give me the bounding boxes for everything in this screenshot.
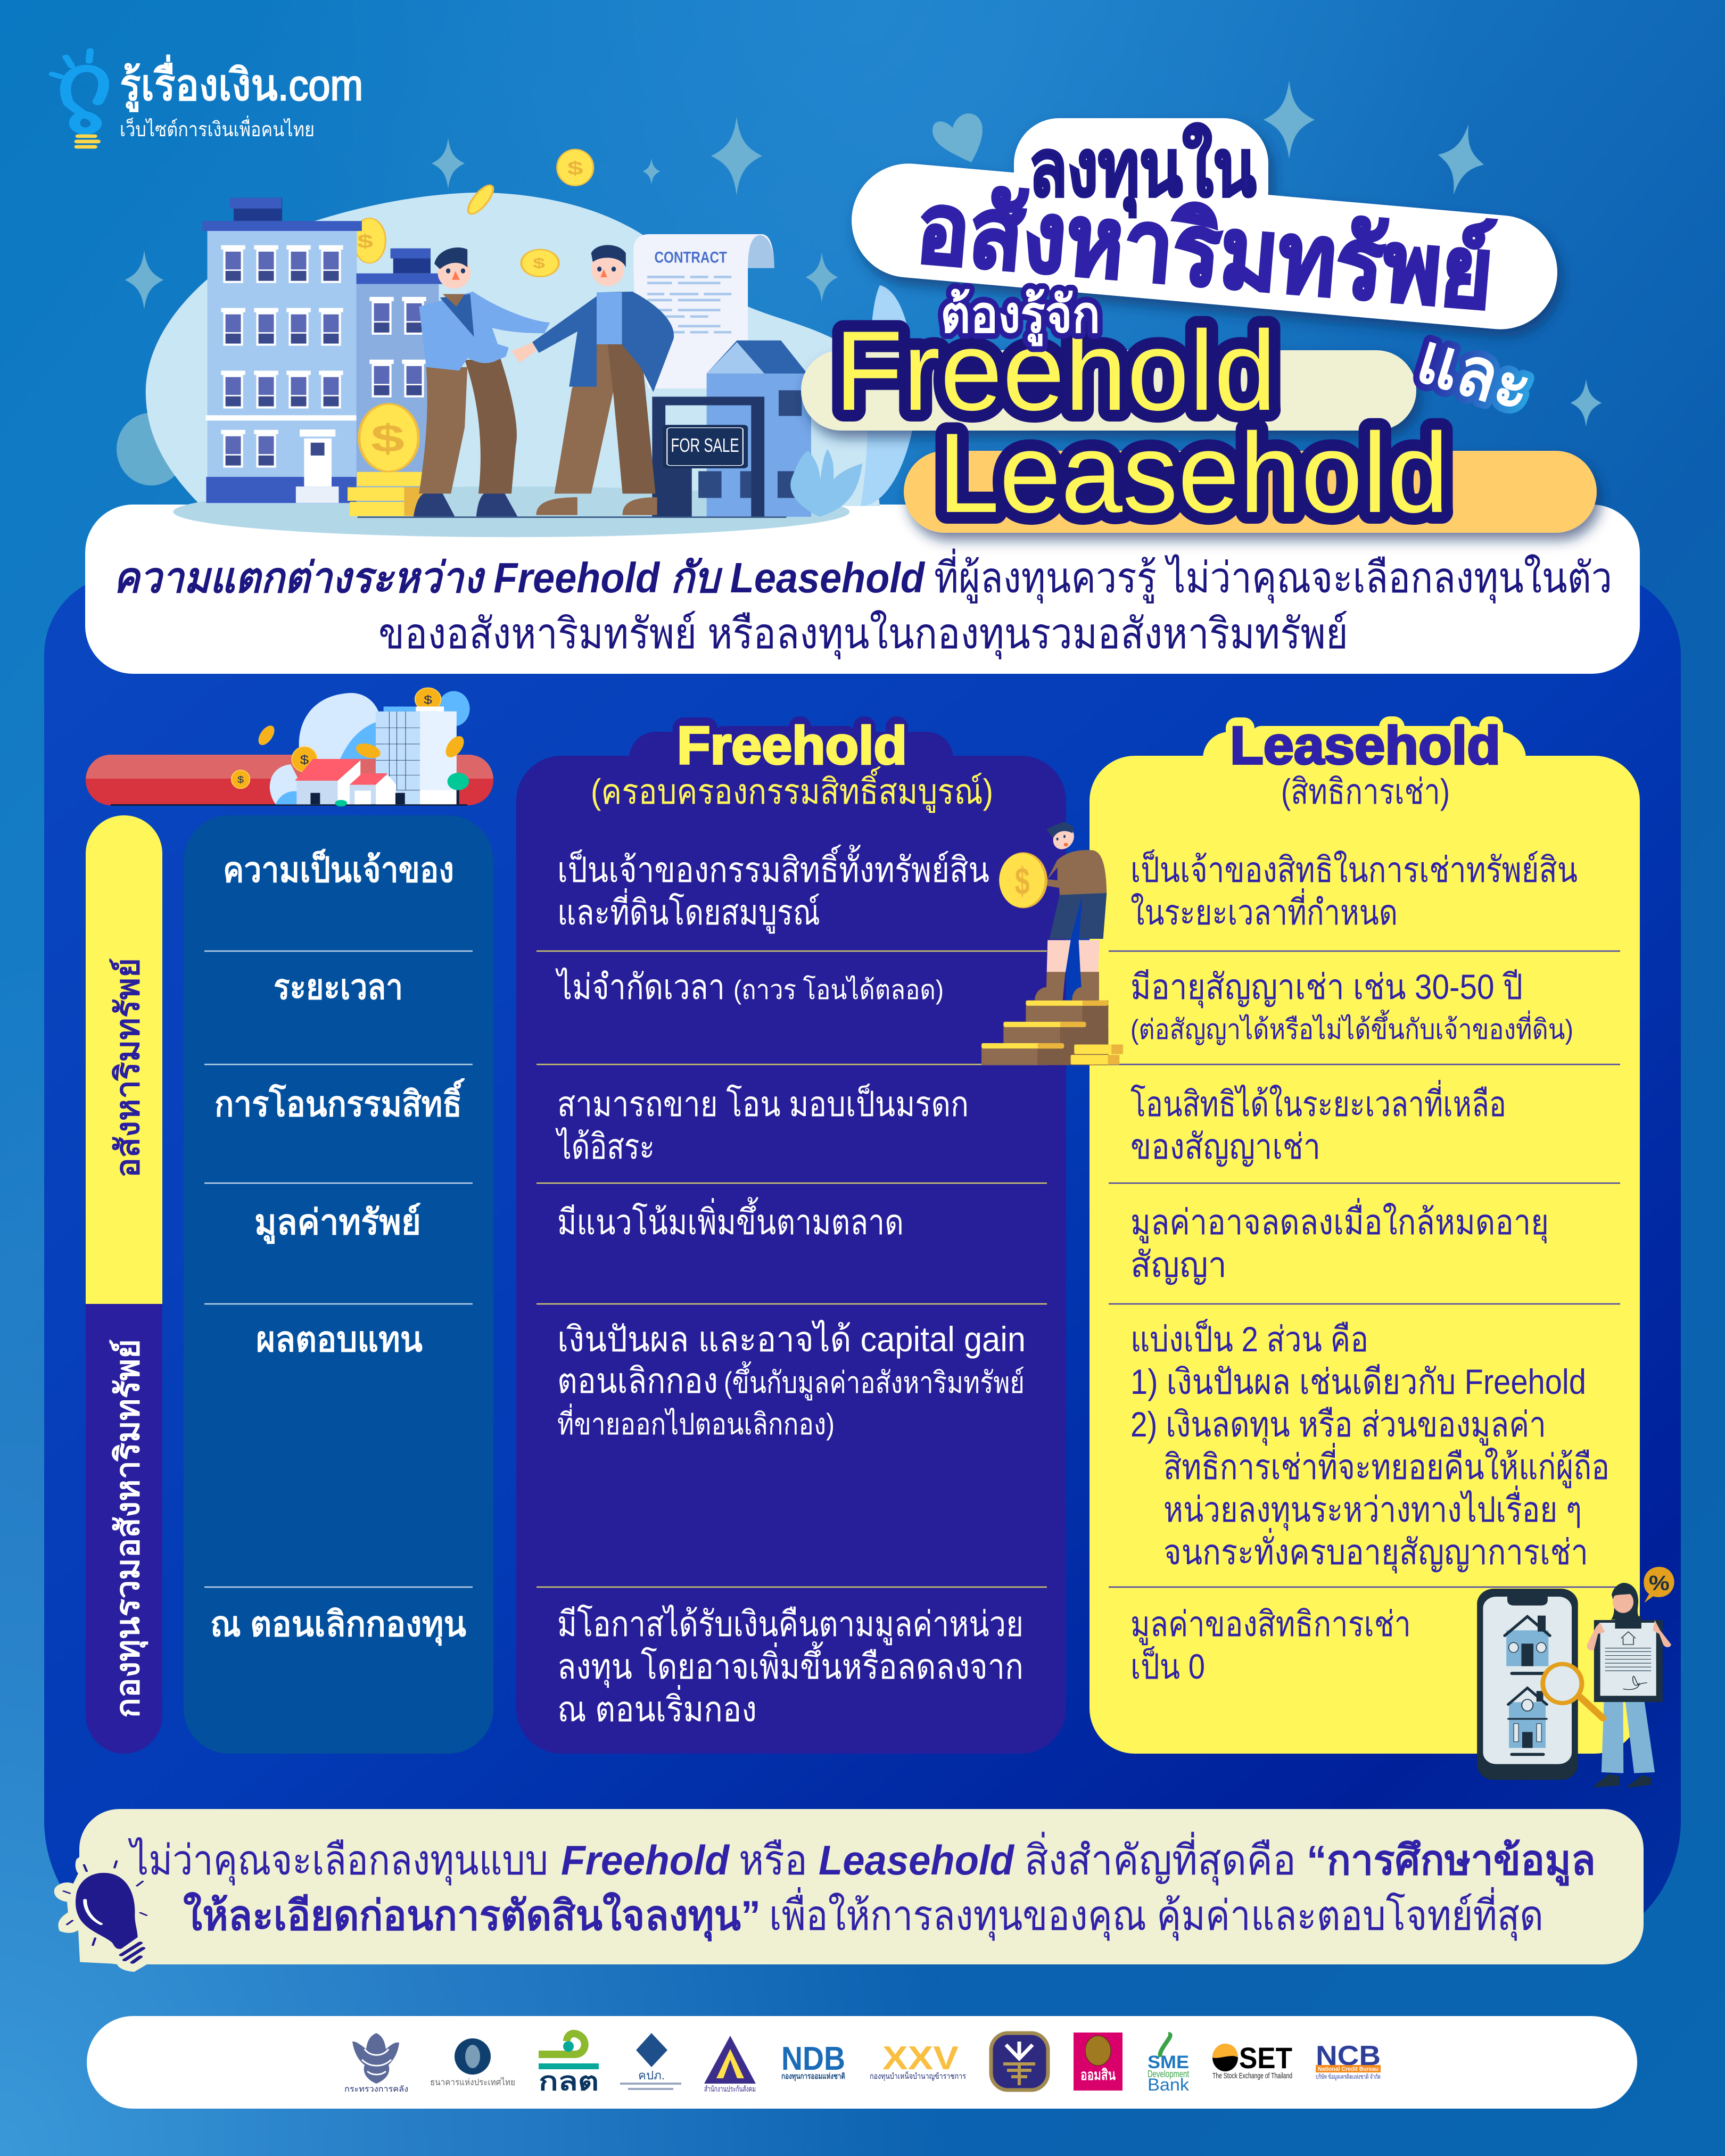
Leasehold end 1: มูลค่าของสิทธิการเช่า [1130,1604,1411,1646]
Freehold return 3: ที่ขายออกไปตอนเลิกกอง) [557,1403,835,1441]
Freehold transfer: สามารถขาย โอน มอบเป็นมรดก [557,1083,969,1124]
Leasehold pill [904,451,1597,533]
label asset value: มูลค่าทรัพย์ [254,1202,421,1244]
title line ต้องรู้จัก: ต้องรู้จัก [940,286,1100,346]
city illustration [232,688,470,806]
logo: ministry of finance: กระทรวงการคลัง [344,2085,408,2094]
Leasehold duration 2: (ต่อสัญญาได้หรือไม่ได้ขึ้นกับเจ้าของที่ดิน) [1130,1010,1573,1045]
word และ: และ [1409,318,1541,427]
Leasehold return 2: 1) เงินปันผล เช่นเดียวกับ Freehold [1130,1362,1586,1401]
icon: logo light bulb [52,51,104,147]
Leasehold subheading: (สิทธิการเช่า) [1281,772,1450,811]
label duration: ระยะเวลา [274,967,403,1006]
logo: NCB: บริษัท ข้อมูลเครดิตแห่งชาติ จำกัด [1316,2073,1381,2081]
main blue panel [44,575,1681,1943]
logo: SEC: กลต [539,2068,599,2096]
Freehold end 2: ลงทุน โดยอาจเพิ่มขึ้นหรือลดลงจาก [557,1641,1024,1688]
Freehold column [516,716,1066,1754]
Freehold ownership text: เป็นเจ้าของกรรมสิทธิ์ทั้งทรัพย์สิน [557,845,989,889]
callout middle: สิ่งสำคัญที่สุดคือ [1025,1832,1296,1886]
callout Freehold: Freehold [561,1837,730,1884]
footer logo bar [87,2016,1637,2109]
Leasehold end 2: เป็น 0 [1130,1646,1205,1686]
contract paper [633,234,774,389]
second building [357,249,447,505]
Leasehold ownership 2: ในระยะเวลาที่กำหนด [1130,888,1398,932]
magnifying glass [1543,1664,1603,1718]
logo: triangle agency: สำนักงานประกันสังคม [704,2085,756,2094]
logo: SET: The Stock Exchange of Thailand [1212,2071,1292,2080]
Leasehold value 2: สัญญา [1130,1245,1227,1285]
Leasehold return 3: 2) เงินลดทุน หรือ ส่วนของมูลค่า [1130,1405,1546,1446]
side tab: real estate [86,815,162,1304]
woman [1587,1583,1671,1788]
callout [79,1809,1644,1964]
label column [184,815,493,1754]
city illustration: $ [300,753,309,767]
percent speech bubble: % [1649,1572,1670,1595]
Freehold return 1: เงินปันผล และอาจได้ capital gain [557,1319,1026,1359]
intro white box [85,505,1640,674]
callout line 2 bold: ให้ละเอียดก่อนการตัดสินใจลงทุน” [183,1891,761,1942]
logo: triangle agency [704,2036,756,2094]
Freehold return 2: ตอนเลิกกอง [557,1361,718,1400]
logo: government pension fund: XXV [882,2040,959,2077]
Leasehold transfer 1: โอนสิทธิได้ในระยะเวลาที่เหลือ [1130,1080,1506,1124]
logo: shield [991,2033,1048,2090]
logo: SEC [539,2034,599,2096]
intro line 1 regular: ที่ผู้ลงทุนควรรู้ ไม่ว่าคุณจะเลือกลงทุนในตัว [934,549,1612,604]
Freehold return 2 note: (ขึ้นกับมูลค่าอสังหาริมทรัพย์ [724,1361,1025,1401]
Leasehold column [1090,716,1640,1754]
Leasehold ownership 1: เป็นเจ้าของสิทธิในการเช่าทรัพย์สิน [1130,849,1578,889]
Leasehold heading: Leasehold [1230,716,1500,775]
Freehold ownership text 2: และที่ดินโดยสมบูรณ์ [557,888,820,934]
logo: bank of thailand [430,2038,515,2087]
logo: GSB [1074,2033,1123,2091]
Freehold heading: Freehold [677,716,907,775]
logo: bank of thailand: ธนาคารแห่งประเทศไทย [430,2077,515,2087]
callout Leasehold: Leasehold [819,1837,1014,1884]
tall apartment building [202,198,362,503]
Leasehold word: Leasehold [938,410,1449,536]
logo: SET: SET [1239,2041,1292,2075]
logo wordmark: รู้เรื่องเงิน.com [120,55,363,111]
logo: NCB: National Credit Bureau [1318,2066,1379,2072]
city illustration: $ [424,693,432,707]
Freehold end 3: ณ ตอนเริ่มกอง [557,1685,757,1729]
Freehold subheading: (ครอบครองกรรมสิทธิ์สมบูรณ์) [591,766,993,813]
man right [532,245,674,515]
Leasehold return 6: จนกระทั่งครบอายุสัญญาการเช่า [1163,1528,1588,1574]
logo: SME bank: SME [1148,2052,1189,2072]
logo: SME bank: Development [1148,2069,1189,2079]
coin stack: $ [371,417,405,460]
title [801,118,1597,536]
callout line 2 regular: เพื่อให้การลงทุนของคุณ คุ้มค่าและตอบโจทย์ที่สุด [769,1887,1544,1941]
big coin: $ [1015,860,1030,903]
Leasehold transfer 2: ของสัญญาเช่า [1130,1127,1320,1167]
house 2 [1507,1688,1548,1756]
logo: SME bank: Bank [1148,2075,1190,2094]
Leasehold return 5: หน่วยลงทุนระหว่างทางไปเรื่อย ๆ [1163,1485,1582,1531]
icon: callout light bulb [54,1856,148,1972]
house with for sale sign: FOR SALE [671,434,739,456]
hero illustration [117,150,914,537]
illustration: man holding coin on steps [981,822,1123,1065]
background stars and heart [125,80,1602,427]
hero back blobs [117,193,914,506]
side label property fund: กองทุนรวมอสังหาริมทรัพย์ [109,1339,148,1718]
callout bold end: “การศึกษาข้อมูล [1307,1837,1596,1886]
logo: SME bank [1148,2034,1190,2094]
red bar [86,755,493,806]
logo [52,51,363,147]
title line ลงทุนใน: ลงทุนใน [1029,123,1256,217]
logo: ministry of finance [344,2033,408,2094]
Freehold end 1: มีโอกาสได้รับเงินคืนตามมูลค่าหน่วย [557,1604,1024,1646]
Freehold transfer 2: ได้อิสระ [555,1127,655,1166]
intro line 2: ของอสังหาริมทรัพย์ หรือลงทุนในกองทุนรวมอสังหาริมทรัพย์ [378,609,1348,659]
logo: national savings fund: NDB [781,2041,845,2077]
logo: OIC [620,2033,681,2089]
contract paper: CONTRACT [655,249,727,266]
steps [981,1001,1123,1065]
big coin [999,852,1047,908]
label ownership: ความเป็นเจ้าของ [223,848,454,889]
intro line 1 bold: ความแตกต่างระหว่าง Freehold กับ Leasehold [113,554,926,601]
logo: national savings fund: กองทุนการออมแห่งชาติ [781,2071,845,2081]
coins in air: $ [567,158,583,179]
Freehold column body [516,716,1066,1754]
label transfer: การโอนกรรมสิทธิ์ [214,1078,465,1124]
Leasehold return 1: แบ่งเป็น 2 ส่วน คือ [1130,1318,1368,1359]
Freehold duration: ไม่จำกัดเวลา [555,967,725,1006]
city illustration: $ [237,775,244,785]
red bar with city illustration [86,688,493,806]
logo tagline: เว็บไซต์การเงินเพื่อคนไทย [120,115,315,141]
callout line 1 start: ไม่ว่าคุณจะเลือกลงทุนแบบ [128,1837,548,1886]
logo: GSB: ออมสิน [1080,2067,1116,2083]
Freehold value: มีแนวโน้มเพิ่มขึ้นตามตลาด [557,1197,904,1242]
logo: SET [1212,2041,1292,2080]
callout or: หรือ [739,1837,807,1884]
Freehold duration note: (ถาวร โอนได้ตลอด) [733,975,944,1005]
side tab: property fund [86,1304,162,1754]
coins in air: $ [533,255,545,271]
phone [1477,1589,1578,1780]
plant [790,449,862,517]
percent speech bubble [1644,1567,1674,1603]
Freehold word: Freehold [835,308,1276,434]
Freehold pill [801,350,1416,431]
house 1 [1505,1616,1550,1675]
ground ellipse [173,486,849,537]
logo: government pension fund [870,2040,966,2081]
Leasehold value 1: มูลค่าอาจลดลงเมื่อใกล้หมดอายุ [1130,1198,1549,1244]
logo: NCB: NCB [1316,2041,1381,2071]
man body [1035,822,1107,1001]
logo: OIC: คปภ. [638,2069,665,2082]
title line อสังหาริมทรัพย์: อสังหาริมทรัพย์ [913,173,1497,329]
label at fund end: ณ ตอนเลิกกองทุน [210,1604,466,1646]
Leasehold return 4: สิทธิการเช่าที่จะทยอยคืนให้แก่ผู้ถือ [1163,1443,1610,1489]
house with for sale sign [358,341,811,517]
side label real estate: อสังหาริมทรัพย์ [109,958,146,1178]
label return: ผลตอบแทน [256,1319,423,1359]
Leasehold duration 1: มีอายุสัญญาเช่า เช่น 30-50 ปี [1130,967,1523,1009]
coins in air [353,150,593,277]
coin stack [348,404,428,516]
title white pill [847,118,1562,334]
coins in air: $ [357,231,373,252]
man left [414,247,550,516]
illustration: phone and woman [1477,1567,1674,1788]
Leasehold column body [1090,716,1640,1754]
logo: government pension fund: กองทุนบำเหน็จบำนาญข้าราชการ [870,2071,966,2081]
